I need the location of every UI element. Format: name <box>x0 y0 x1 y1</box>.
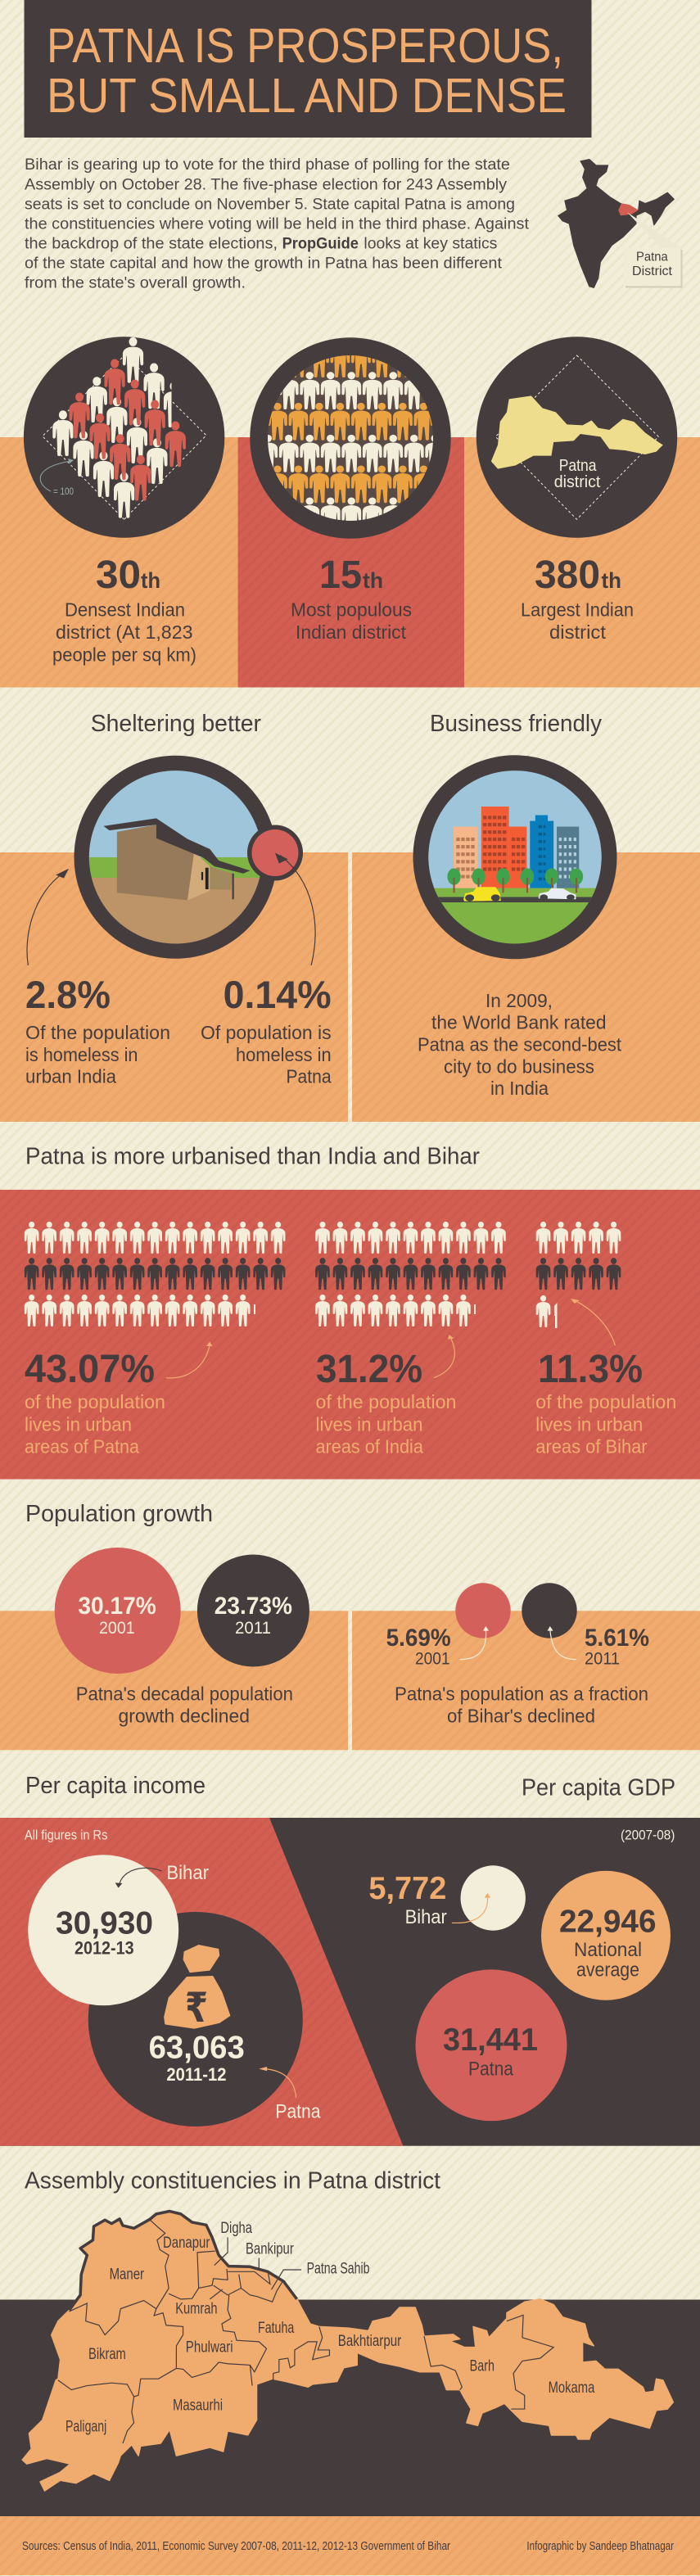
Patna income bubble <box>88 1912 321 2126</box>
size circle with district map: Patna <box>559 457 597 475</box>
intro text: of the state capital and how the growth in Patna has been different <box>25 255 503 273</box>
India map with Patna callout <box>558 159 683 288</box>
stat: 15th most populous: Indian district <box>296 621 407 643</box>
stat: 31.2% India: 31.2% <box>316 1348 422 1391</box>
panel: urbanisation <box>0 1190 700 1479</box>
stat: 380th largest: district <box>549 621 607 643</box>
bubble: 23.73% 2011: 2011 <box>235 1619 271 1638</box>
intro text: looks at key statics <box>364 236 497 253</box>
caption <box>395 1683 648 1726</box>
constituency labels: Bankipur <box>246 2240 294 2258</box>
stat: 2.8% homeless <box>25 973 170 1087</box>
pictogram: Bihar 11.3% <box>536 1222 621 1328</box>
intro text: the backdrop of the state elections, <box>25 236 278 253</box>
density circle with people <box>24 337 224 538</box>
stat: 0.14% homeless <box>201 973 332 1087</box>
business caption: city to do business <box>444 1056 594 1078</box>
national average bubble <box>541 1871 671 2000</box>
national average bubble: National <box>574 1939 642 1961</box>
title: PATNA IS PROSPEROUS, <box>47 19 563 73</box>
footer <box>0 2516 700 2575</box>
Bihar income bubble: 30,930 <box>56 1906 153 1941</box>
constituency labels: Bakhtiarpur <box>338 2333 402 2350</box>
intro text <box>25 156 530 292</box>
density circle with people: = 100 <box>53 486 74 497</box>
panel: district rankings <box>0 337 700 688</box>
business caption <box>418 990 622 1099</box>
caption <box>76 1683 293 1726</box>
bubble: 5.69% 2001: 5.69% <box>386 1625 451 1652</box>
heading: per capita income: Per capita income <box>25 1773 205 1799</box>
stat: 380th largest <box>521 554 634 643</box>
stat: 30th densest: th <box>141 568 160 593</box>
city in circle <box>413 755 617 959</box>
stat: 11.3% Bihar: lives in urban <box>535 1413 643 1435</box>
arrows <box>166 1299 615 1378</box>
icon: money bag <box>165 1945 229 2031</box>
stat: 15th most populous: Most populous <box>291 599 412 621</box>
business caption: Patna as the second-best <box>418 1033 622 1055</box>
stat: 43.07% Patna <box>25 1348 165 1457</box>
stat: 43.07% Patna: 43.07% <box>25 1348 155 1391</box>
stat: 31.2% India: lives in urban <box>316 1413 422 1435</box>
bubble: 23.73% 2011: 23.73% <box>215 1593 292 1620</box>
size circle with district map <box>476 337 677 538</box>
panel: share of Bihar <box>352 1583 700 1750</box>
heading: per capita GDP: Per capita GDP <box>522 1774 675 1801</box>
Patna GDP bubble <box>416 1969 567 2121</box>
panel: per capita GDP <box>368 1828 675 2121</box>
stat: 15th most populous <box>291 554 412 643</box>
stat: 30th densest: district (At 1,823 <box>56 621 193 643</box>
business caption: In 2009, <box>485 990 553 1011</box>
panel: per capita GDP: (2007-08) <box>621 1828 675 1843</box>
map: assembly constituencies <box>22 2212 673 2491</box>
stat: 2.8% homeless: urban India <box>25 1066 116 1087</box>
bubble: 23.73% 2011 <box>197 1554 309 1667</box>
Bihar GDP bubble: 5,772 <box>368 1871 446 1906</box>
stat: 43.07% Patna: areas of Patna <box>25 1435 139 1457</box>
stat: 380th largest: Largest Indian <box>521 599 634 621</box>
business caption: in India <box>490 1078 549 1099</box>
arrow to Patna figure <box>275 852 315 965</box>
heading: population growth: Population growth <box>25 1501 213 1527</box>
caption: Patna's population as a fraction <box>395 1683 648 1705</box>
stat: 2.8% homeless: is homeless in <box>25 1044 138 1065</box>
size circle with district map: district <box>554 473 601 491</box>
panel: decadal growth <box>0 1548 348 1750</box>
Patna income bubble: 63,063 <box>149 2030 245 2065</box>
stat: 11.3% Bihar: 11.3% <box>538 1348 643 1391</box>
bubble: 5.61% 2011: 2011 <box>585 1650 620 1669</box>
Patna GDP bubble: 31,441 <box>443 2022 538 2058</box>
intro text: seats is set to conclude on November 5. State capital Patna is among <box>25 197 515 214</box>
constituency labels <box>65 2220 595 2436</box>
heading: urbanisation: Patna is more urbanised than India and Bihar <box>25 1144 480 1170</box>
constituency labels: Bikram <box>88 2346 126 2363</box>
stat: 0.14% homeless: 0.14% <box>224 973 332 1016</box>
intro text: from the state's overall growth. <box>25 275 246 292</box>
constituency labels: Barh <box>470 2358 495 2375</box>
caption: growth declined <box>118 1705 250 1726</box>
caption: Patna's decadal population <box>76 1683 293 1705</box>
stat: 43.07% Patna: lives in urban <box>25 1413 132 1435</box>
Patna income bubble: 2011-12 <box>166 2064 226 2085</box>
national average bubble: 22,946 <box>559 1904 657 1939</box>
stat: 2.8% homeless: 2.8% <box>25 973 111 1016</box>
stat: 15th most populous: 15 <box>319 554 362 597</box>
bubble: 30.17% 2001: 30.17% <box>78 1593 156 1620</box>
India map with Patna callout: Patna <box>636 250 668 264</box>
Bihar GDP bubble: Bihar <box>405 1906 447 1928</box>
stat: 15th most populous: th <box>363 568 383 593</box>
heading: assembly constituencies: Assembly constituencies in Patna district <box>25 2168 440 2194</box>
arrow to urban India figure <box>27 869 69 965</box>
stat: 11.3% Bihar <box>535 1348 676 1457</box>
business caption: the World Bank rated <box>431 1012 606 1033</box>
title: BUT SMALL AND DENSE <box>47 69 567 123</box>
stat: 30th densest <box>52 554 196 665</box>
bubble: 5.61% 2011 <box>522 1583 649 1669</box>
panel: sheltering <box>0 756 348 1122</box>
house in circle <box>74 756 303 959</box>
panel: per capita GDP background <box>0 1818 700 2146</box>
panel: per capita income <box>0 1818 403 2146</box>
Bihar income bubble: 2012-13 <box>75 1938 134 1959</box>
stat: 11.3% Bihar: of the population <box>535 1391 676 1412</box>
constituency labels: Fatuha <box>258 2320 295 2337</box>
caption: of Bihar's declined <box>447 1705 595 1726</box>
bubble: 5.61% 2011: 5.61% <box>585 1625 649 1652</box>
Bihar income bubble <box>28 1855 209 2005</box>
constituency labels: Danapur <box>163 2235 210 2252</box>
bubble: 30.17% 2001: 2001 <box>99 1619 135 1638</box>
population circle with people <box>250 337 451 539</box>
pictogram: India 31.2% <box>315 1222 506 1326</box>
intro text: Bihar is gearing up to vote for the third phase of polling for the state <box>25 156 510 174</box>
pictogram: Patna 43.07% <box>25 1222 285 1326</box>
stat: 31.2% India: of the population <box>316 1391 457 1412</box>
stat: 0.14% homeless: homeless in <box>236 1044 332 1065</box>
dark band behind map <box>0 2299 700 2516</box>
constituency labels: Kumrah <box>175 2300 218 2317</box>
constituency labels: Paliganj <box>65 2419 106 2436</box>
panel: per capita income: All figures in Rs <box>25 1828 107 1843</box>
stat: 380th largest: 380 <box>535 554 600 597</box>
constituency labels: Patna Sahib <box>307 2261 370 2278</box>
constituency labels: Digha <box>220 2220 252 2237</box>
stat: 30th densest: Densest Indian <box>65 599 185 621</box>
stat: 0.14% homeless: Patna <box>287 1066 332 1087</box>
stat: 2.8% homeless: Of the population <box>25 1022 170 1043</box>
footer: Sources: Census of India, 2011, Economic Survey 2007-08, 2011-12, 2012-13 Government of Bihar <box>22 2539 450 2553</box>
Bihar income bubble: Bihar <box>166 1862 209 1884</box>
heading: business friendly: Business friendly <box>430 711 602 737</box>
heading: sheltering better: Sheltering better <box>91 711 261 737</box>
stat: 30th densest: 30 <box>96 554 141 597</box>
bubble: 5.69% 2001 <box>386 1583 511 1669</box>
panel: business friendly <box>352 755 700 1122</box>
Patna GDP bubble: Patna <box>468 2058 514 2080</box>
icon: money bag: ₹ <box>185 1984 208 2031</box>
stat: 11.3% Bihar: areas of Bihar <box>535 1435 648 1457</box>
Bihar GDP bubble <box>368 1865 526 1931</box>
stat: 31.2% India: areas of India <box>316 1435 423 1457</box>
stat: 380th largest: th <box>601 568 621 593</box>
bubble: 5.69% 2001: 2001 <box>415 1650 450 1669</box>
constituency labels: Masaurhi <box>173 2397 223 2415</box>
title <box>25 0 591 138</box>
national average bubble: average <box>576 1959 639 1981</box>
constituency labels: Phulwari <box>186 2339 233 2356</box>
stat: 0.14% homeless: Of population is <box>201 1022 332 1043</box>
constituency labels: Mokama <box>549 2379 595 2397</box>
stat: 31.2% India <box>316 1348 457 1457</box>
stat: 30th densest: people per sq km) <box>52 644 196 665</box>
Patna income bubble: Patna <box>275 2101 321 2123</box>
intro text: the constituencies where voting will be held in the third phase. Against <box>25 216 530 233</box>
intro text: Assembly on October 28. The five-phase election for 243 Assembly <box>25 177 508 194</box>
intro text: PropGuide <box>282 236 359 253</box>
bubble: 30.17% 2001 <box>55 1548 181 1674</box>
constituency labels: Maner <box>110 2266 145 2284</box>
stat: 43.07% Patna: of the population <box>25 1391 165 1412</box>
India map with Patna callout: District <box>632 264 673 278</box>
